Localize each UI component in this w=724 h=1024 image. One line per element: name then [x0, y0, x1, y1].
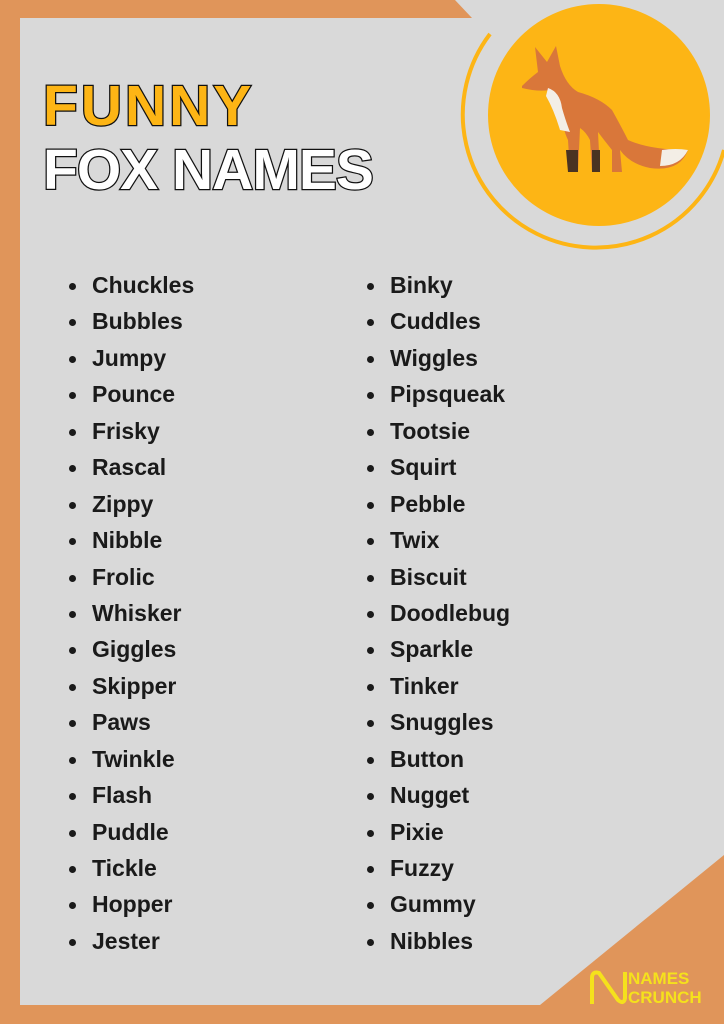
list: column 2: Cuddles [390, 308, 481, 334]
list: column 1: Nibble [92, 527, 162, 553]
list: column 1: Flash [92, 782, 152, 808]
list: column 2: Nibbles [390, 928, 473, 954]
list: column 2: Squirt [390, 454, 456, 480]
list: column 1: Chuckles [92, 272, 194, 298]
list: column 2: Sparkle [390, 636, 473, 662]
list: column 2: Biscuit [390, 564, 467, 590]
list: column 2: Nugget [390, 782, 469, 808]
logo: names crunch: CRUNCH [628, 988, 702, 1007]
list: column 2: Binky [390, 272, 453, 298]
list: column 2: Button [390, 746, 464, 772]
list: column 2: Gummy [390, 891, 476, 917]
list: column 1: Jumpy [92, 345, 166, 371]
list: column 2: Pixie [390, 819, 444, 845]
list: column 1: Paws [92, 709, 151, 735]
circle [463, 4, 724, 248]
list: column 2: Tinker [390, 673, 459, 699]
list: column 2: Pebble [390, 491, 465, 517]
list: column 2: Snuggles [390, 709, 494, 735]
list: column 2: Wiggles [390, 345, 478, 371]
logo: names crunch: NAMES [628, 969, 689, 988]
title [43, 74, 373, 202]
list: column 1: Zippy [92, 491, 153, 517]
list: column 1: Skipper [92, 673, 176, 699]
list: column 1: Puddle [92, 819, 169, 845]
list: column 1: Whisker [92, 600, 181, 626]
list: column 1: Twinkle [92, 746, 175, 772]
list: column 1: Hopper [92, 891, 172, 917]
list: column 2: Doodlebug [390, 600, 510, 626]
list: column 1: Rascal [92, 454, 166, 480]
list: column 2: Twix [390, 527, 439, 553]
list: column 1: Frolic [92, 564, 155, 590]
list: column 1 [69, 272, 194, 954]
list: column 1: Pounce [92, 381, 175, 407]
list: column 1: Jester [92, 928, 160, 954]
logo: names crunch [590, 969, 702, 1007]
list: column 1: Tickle [92, 855, 157, 881]
fox circle illustration [460, 4, 724, 250]
list: column 1: Giggles [92, 636, 176, 662]
title: FOX NAMES [43, 138, 373, 202]
list: column 2 [367, 272, 510, 954]
list: column 1: Frisky [92, 418, 160, 444]
list: column 1: Bubbles [92, 308, 183, 334]
title: FUNNY [43, 74, 254, 138]
list: column 2: Pipsqueak [390, 381, 505, 407]
icon: fox [522, 46, 688, 172]
list: column 2: Tootsie [390, 418, 470, 444]
list: column 2: Fuzzy [390, 855, 454, 881]
